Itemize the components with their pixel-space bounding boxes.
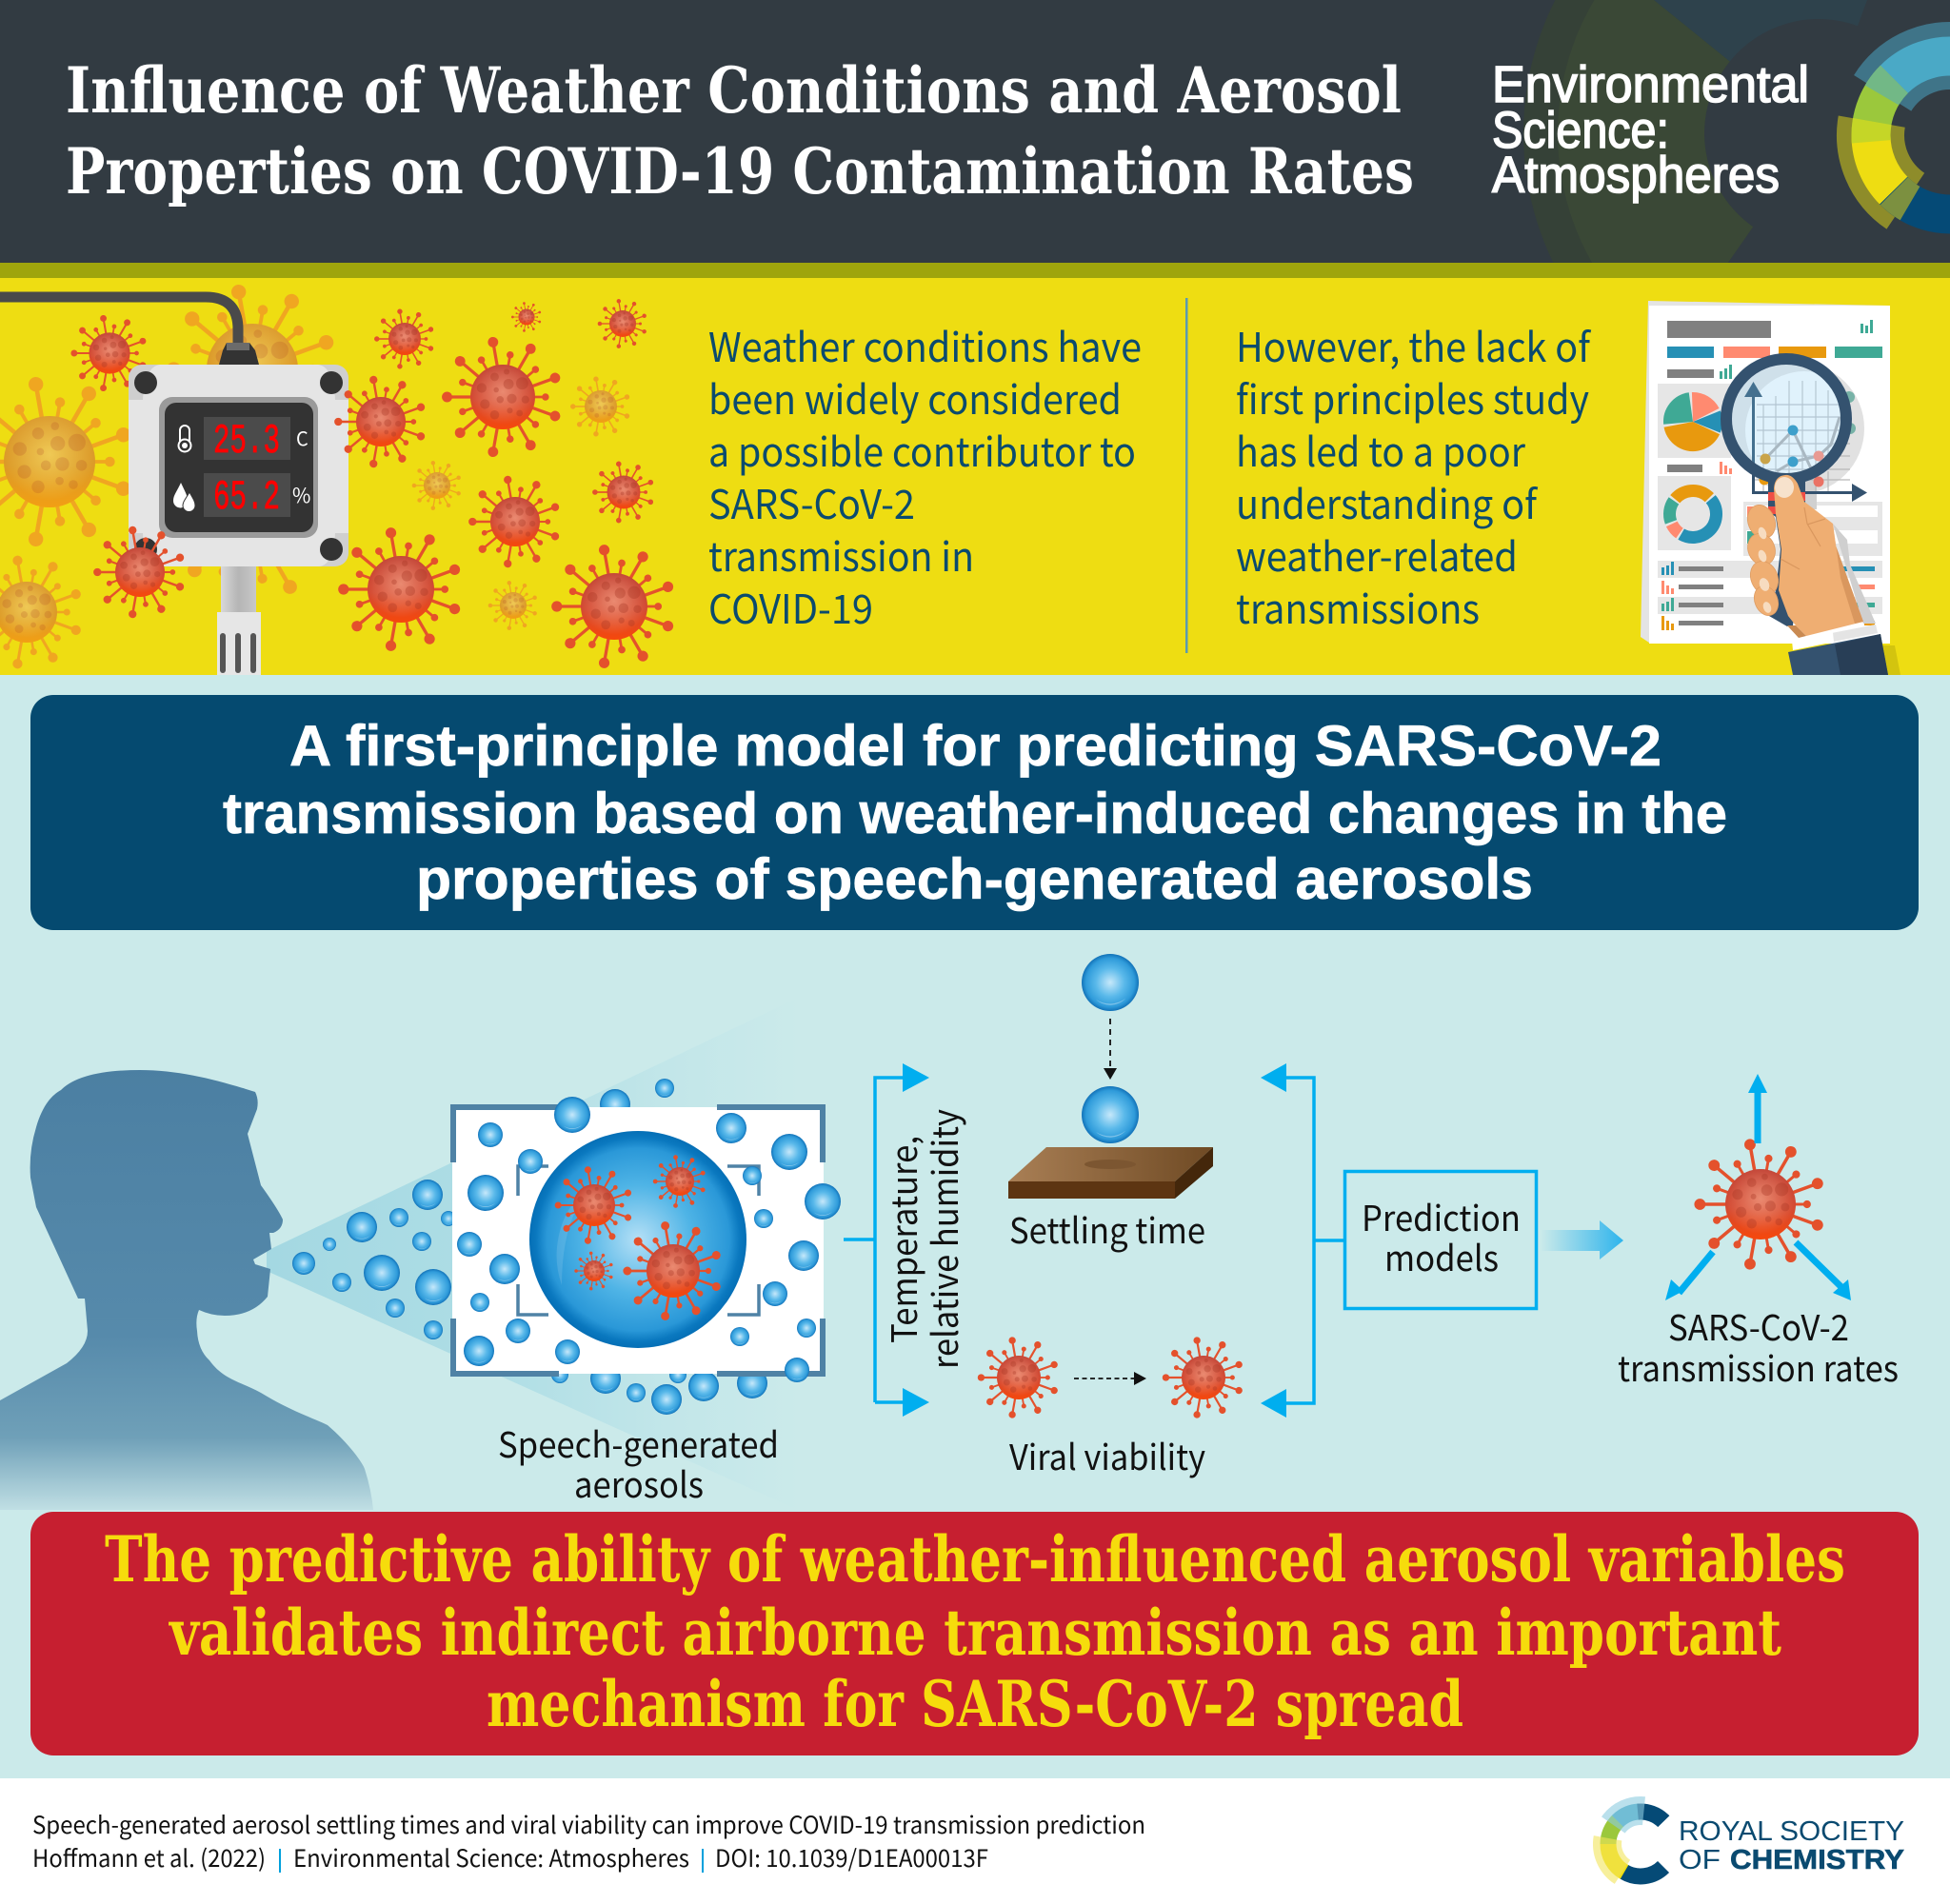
heading: model description xyxy=(223,714,1727,911)
label: speech-generated aerosols xyxy=(498,1417,779,1508)
panel: aerosol zoom frame xyxy=(452,1097,841,1382)
illustration: large droplet with viruses xyxy=(529,1131,746,1348)
label: viral viability: Viral viability xyxy=(1009,1429,1205,1480)
text: weather conditions statement: transmission in xyxy=(708,526,974,584)
footer: citation: Hoffmann et al. (2022) xyxy=(32,1840,266,1874)
illustration: red viruses in front of sensor xyxy=(93,375,426,619)
panel: prediction models box xyxy=(1344,1171,1537,1308)
illustration: viral viability change xyxy=(978,1337,1244,1418)
illustration: droplets in frame xyxy=(457,1097,841,1382)
label: settling time: Settling time xyxy=(1009,1202,1205,1254)
arrow: to transmission rates xyxy=(1541,1220,1623,1259)
text: weather conditions statement: been widely considered xyxy=(708,368,1122,426)
magnifier handle xyxy=(1768,479,1805,626)
hand xyxy=(1774,475,1863,636)
icon: journal ring logo xyxy=(1839,24,1950,247)
label: SARS-CoV-2 transmission rates: transmission rates xyxy=(1618,1340,1899,1392)
illustration: speech cone xyxy=(267,997,800,1511)
heading: model description: properties of speech-generated aerosols xyxy=(416,847,1533,911)
panel: red conclusion banner xyxy=(30,1512,1919,1755)
arrow: branch from prediction models xyxy=(1261,1063,1344,1418)
title xyxy=(66,53,1414,208)
panel: blue model banner xyxy=(30,695,1919,930)
journal name xyxy=(1492,56,1809,204)
text: lack of first principles statement xyxy=(1236,316,1591,636)
illustration: virus spreading xyxy=(1665,1074,1851,1300)
panel: prediction models box: models xyxy=(1384,1230,1499,1281)
illustration: red viruses xyxy=(70,299,675,669)
label: SARS-CoV-2 transmission rates: SARS-CoV-2 xyxy=(1668,1299,1849,1351)
olive divider band xyxy=(0,263,1950,278)
heading: conclusion xyxy=(105,1522,1845,1741)
panel: prediction models box: Prediction xyxy=(1362,1190,1521,1241)
footer: citation: Speech-generated aerosol settling times and viral viability can improve COVID-19 transmission prediction xyxy=(32,1807,1145,1841)
label: temperature, relative humidity xyxy=(876,1109,968,1369)
text: lack of first principles statement: first principles study xyxy=(1236,368,1589,426)
journal name: Environmental xyxy=(1492,56,1809,113)
label: speech-generated aerosols: Speech-generated xyxy=(498,1417,779,1468)
logo: Royal Society of Chemistry: OF xyxy=(1679,1845,1721,1875)
label: temperature, relative humidity: Temperature, xyxy=(876,1136,927,1343)
journal name: Atmospheres xyxy=(1492,147,1780,204)
logo: Royal Society of Chemistry: ROYAL SOCIETY xyxy=(1679,1816,1904,1847)
label: temperature, relative humidity: relative humidity xyxy=(917,1109,968,1369)
text: weather conditions statement: a possible contributor to xyxy=(708,421,1136,479)
illustration: weather sensor xyxy=(0,297,348,675)
panel: yellow context band xyxy=(0,278,1950,675)
text: lack of first principles statement: However, the lack of xyxy=(1236,316,1591,374)
panel: header xyxy=(0,0,1950,263)
logo: Royal Society of Chemistry xyxy=(1594,1797,1904,1891)
label: SARS-CoV-2 transmission rates xyxy=(1618,1299,1899,1392)
illustration: falling droplet xyxy=(1082,954,1139,1011)
title: Properties on COVID-19 Contamination Rates xyxy=(66,134,1414,208)
text: weather conditions statement: Weather conditions have xyxy=(708,316,1142,374)
illustration: orange viruses xyxy=(0,284,630,669)
text: lack of first principles statement: transmissions xyxy=(1236,578,1480,636)
illustration: weather sensor: C xyxy=(296,424,308,451)
title: Influence of Weather Conditions and Aerosol xyxy=(66,53,1402,128)
illustration: weather sensor: % xyxy=(292,481,310,509)
arrow: branch to settling time and viral viability xyxy=(844,1063,929,1417)
illustration: weather sensor: 25.3 xyxy=(213,418,280,466)
shirt cuff and sleeve xyxy=(1792,625,1878,650)
footer: citation: DOI: 10.1039/D1EA00013F xyxy=(715,1840,988,1874)
illustration: settled droplet on surface xyxy=(1008,1086,1213,1199)
panel: main teal area xyxy=(0,675,1950,1778)
illustration: person silhouette xyxy=(0,1070,373,1510)
text: weather conditions statement: COVID-19 xyxy=(708,578,873,636)
text: weather conditions statement xyxy=(708,316,1142,636)
illustration: weather sensor: 65.2 xyxy=(213,474,280,522)
journal name: Science: xyxy=(1492,102,1669,159)
footer: citation: Environmental Science: Atmospheres xyxy=(293,1840,689,1874)
text: lack of first principles statement: understanding of xyxy=(1236,473,1538,531)
illustration: report under magnifying glass xyxy=(1641,301,1900,675)
heading: model description: A first-principle model for predicting SARS-CoV-2 xyxy=(289,714,1661,778)
text: weather conditions statement: SARS-CoV-2 xyxy=(708,473,915,531)
illustration: droplets leaving the mouth xyxy=(292,1079,767,1415)
label: speech-generated aerosols: aerosols xyxy=(574,1457,704,1508)
heading: conclusion: mechanism for SARS-CoV-2 spread xyxy=(487,1667,1463,1741)
text: lack of first principles statement: has led to a poor xyxy=(1236,421,1526,479)
text: lack of first principles statement: weather-related xyxy=(1236,526,1518,584)
footer: citation xyxy=(32,1807,1145,1874)
heading: model description: transmission based on weather-induced changes in the xyxy=(223,782,1727,845)
logo: Royal Society of Chemistry: CHEMISTRY xyxy=(1730,1845,1904,1875)
arrow: falling direction xyxy=(1104,1019,1117,1080)
